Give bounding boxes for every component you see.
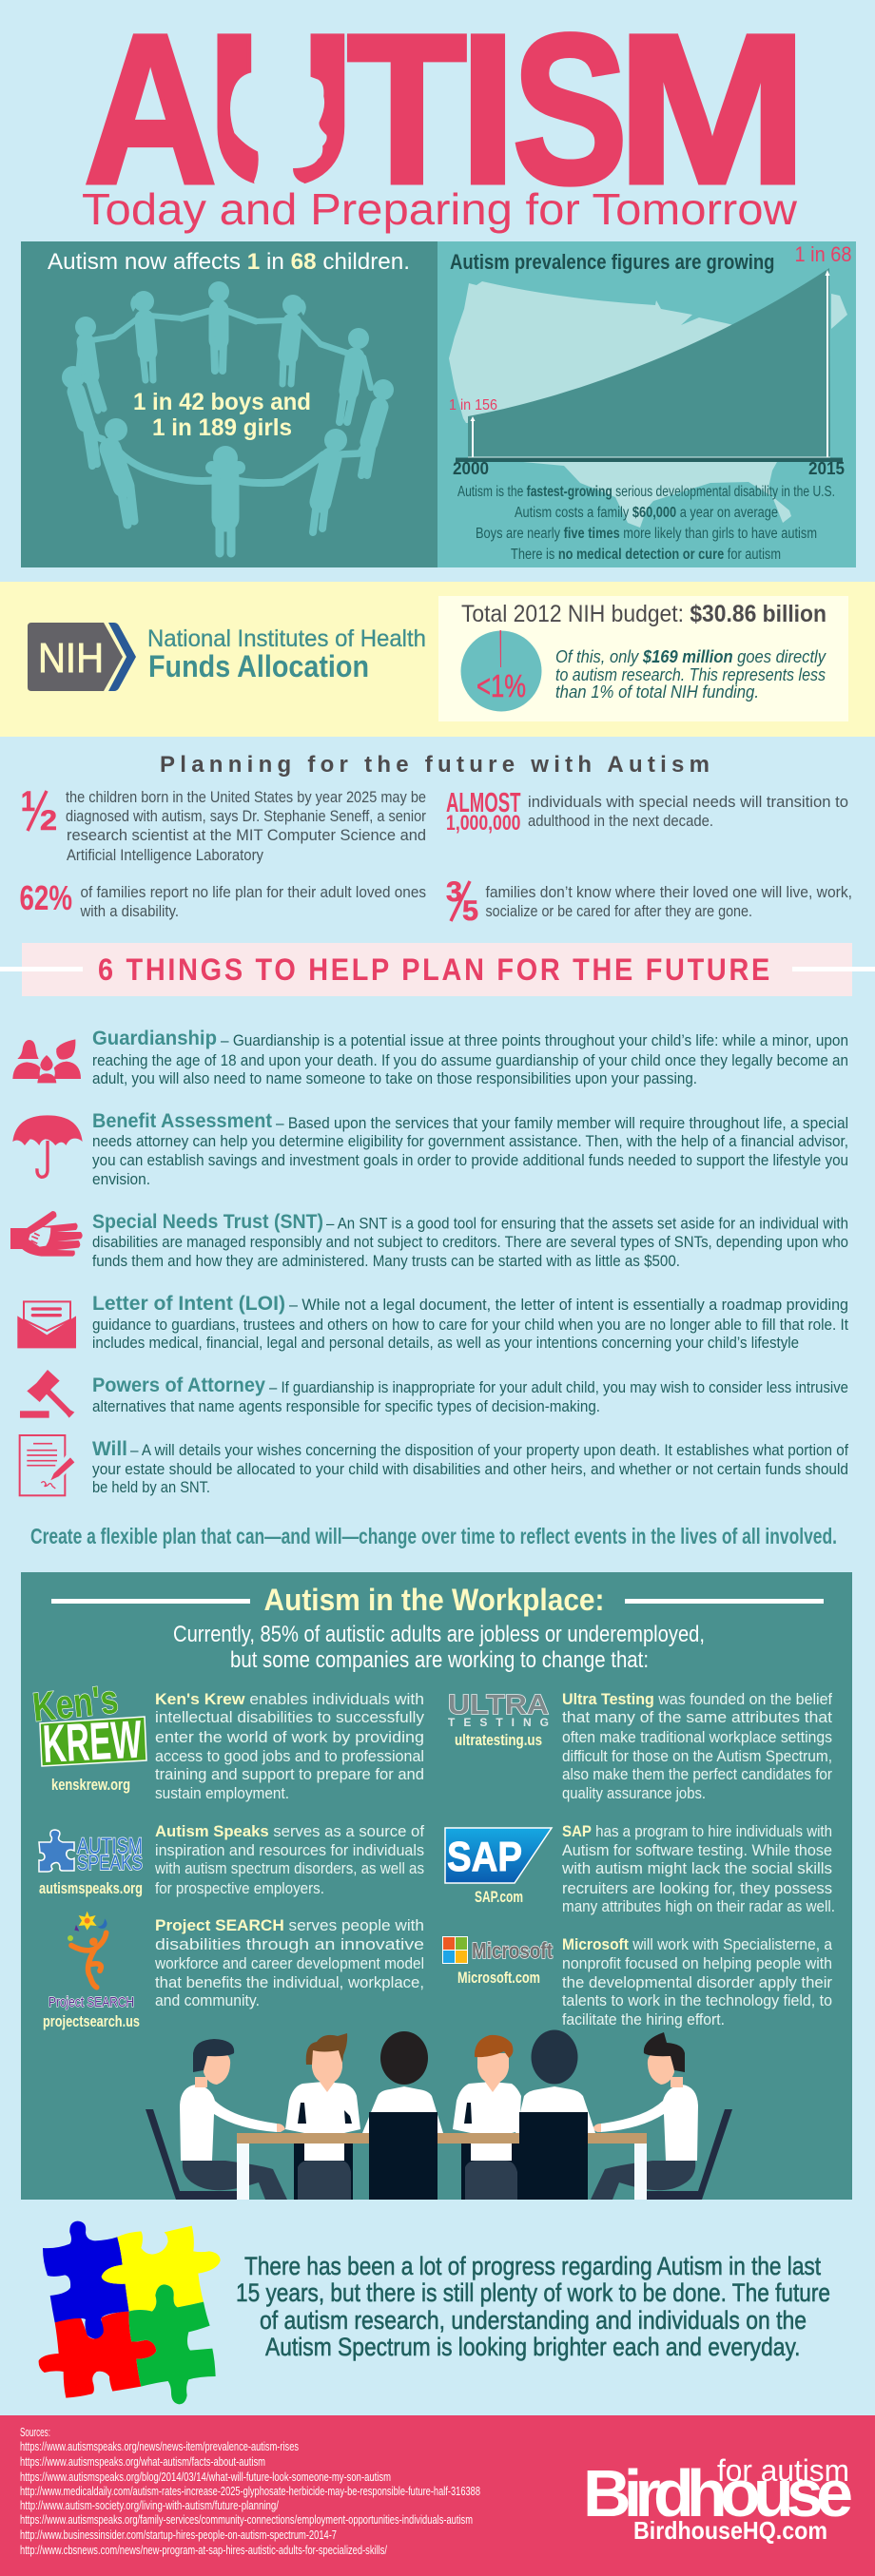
heading: workplace bbox=[51, 1583, 824, 1617]
text block: Ken's Krew: enter the world of work by providing bbox=[155, 1728, 424, 1746]
person: front orange hair bbox=[453, 2035, 521, 2200]
item: letter of intent bbox=[17, 1293, 848, 1352]
text block: Ultra Testing: often make traditional workplace settings bbox=[562, 1728, 832, 1746]
text block bbox=[92, 1379, 848, 1415]
stat: boys and girls: 1 in 42 boys and bbox=[133, 389, 311, 415]
text block: Microsoft: Microsoft will work with Specialisterne, a bbox=[562, 1935, 832, 1953]
stat: three fifths: 3 bbox=[446, 876, 462, 908]
arrow: year 2000 bbox=[470, 416, 476, 457]
chart: pie less than 1 percent: <1% bbox=[476, 668, 526, 703]
stat: boys and girls bbox=[133, 389, 311, 441]
person: back navy hair bbox=[515, 2030, 595, 2133]
text block: share of funding: than 1% of total NIH funding. bbox=[555, 682, 759, 702]
text block: Microsoft: facilitate the hiring effort. bbox=[562, 2010, 725, 2028]
text block: diagnosed with autism, says Dr. Stephanie Seneff, a senior bbox=[66, 807, 426, 825]
text block: Project SEARCH bbox=[154, 1916, 424, 2009]
url: kenskrew.org: kenskrew.org bbox=[51, 1776, 130, 1794]
url: Microsoft.com: Microsoft.com bbox=[457, 1969, 540, 1987]
text block: Ken's Krew: access to good jobs and to professional bbox=[155, 1747, 424, 1765]
text block: SAP: SAP has a program to hire individuals with bbox=[562, 1822, 832, 1840]
text block: Microsoft: nonprofit focused on helping people with bbox=[562, 1954, 832, 1972]
item: special needs trust bbox=[10, 1211, 848, 1270]
text block: facts: Autism costs a family $60,000 a year on average bbox=[515, 505, 778, 521]
text block: – While not a legal document, the letter of intent is essentially a roadmap providing bbox=[289, 1297, 848, 1314]
text block: adulthood in the next decade. bbox=[528, 812, 713, 830]
icon: document with pen bbox=[20, 1435, 76, 1495]
chart: pie less than 1 percent bbox=[460, 630, 542, 711]
sources: Sources: bbox=[20, 2425, 50, 2439]
text block: envision. bbox=[92, 1171, 150, 1188]
text block: adult, you will also need to name someone to take on those responsibilities upon your passing. bbox=[92, 1070, 697, 1087]
text block: intro bbox=[173, 1622, 705, 1673]
text block: the children born in the United States by year 2025 may be bbox=[66, 788, 426, 806]
logo: Ken's Krew bbox=[30, 1677, 146, 1774]
sources bbox=[20, 2425, 480, 2557]
panel: NIH budget bbox=[438, 596, 848, 721]
text block: Project SEARCH: that benefits the individual, workplace, bbox=[155, 1973, 424, 1991]
text block: facts bbox=[457, 484, 835, 563]
arrow: year 2015 bbox=[826, 270, 829, 457]
text block: individuals with special needs will transition to bbox=[528, 793, 848, 811]
subtitle: Today and Preparing for Tomorrow bbox=[82, 184, 798, 234]
text block: Project SEARCH: Project SEARCH serves people with bbox=[155, 1916, 424, 1934]
stat: 62 percent: 62% bbox=[19, 878, 72, 917]
text block: research scientist at the MIT Computer Science and bbox=[67, 826, 426, 844]
text block: share of funding: to autism research. This represents less bbox=[555, 665, 826, 684]
text block: alternatives that name agents responsible for specific types of decision-making. bbox=[92, 1398, 600, 1415]
logo: Project SEARCH bbox=[49, 1912, 134, 2010]
text block: Microsoft: talents to work in the technology field, to bbox=[562, 1991, 832, 2009]
text block: socialize or be cared for after they are gone. bbox=[485, 902, 752, 920]
logo: Ken's Krew: KREW bbox=[41, 1709, 144, 1774]
text block: of families report no life plan for their adult loved ones bbox=[80, 883, 426, 901]
text block: SAP: with autism might lack the social skills bbox=[561, 1859, 832, 1877]
heading: Benefit Assessment bbox=[92, 1110, 272, 1132]
logo: Autism Speaks: AUTISM bbox=[77, 1834, 143, 1859]
text block: Microsoft bbox=[562, 1935, 832, 2028]
text block: Autism Speaks bbox=[154, 1822, 424, 1897]
person: front brown hair bbox=[285, 2033, 360, 2200]
panel: NIH band bbox=[0, 582, 875, 737]
stat: almost 1,000,000: 1,000,000 bbox=[446, 811, 521, 835]
heading: prevalence figures: Autism prevalence figures are growing bbox=[450, 250, 774, 274]
item: guardianship bbox=[12, 1028, 848, 1087]
text block: Ultra Testing: also make them the perfect candidates for bbox=[562, 1765, 832, 1783]
text block: with a disability. bbox=[80, 902, 179, 920]
item: will bbox=[20, 1435, 848, 1496]
sources: https://www.autismspeaks.org/blog/2014/03/14/what-will-future-look-someone-my-son-autism bbox=[20, 2470, 391, 2484]
url: SAP.com: SAP.com bbox=[475, 1888, 523, 1906]
icon: puzzle bbox=[39, 2221, 221, 2404]
map: US silhouette bbox=[449, 281, 847, 528]
text block: closing statement bbox=[236, 2252, 830, 2361]
text block: Ultra Testing bbox=[562, 1690, 832, 1802]
text block: families don’t know where their loved one will live, work, bbox=[485, 883, 852, 901]
sources: http://www.autism-society.org/living-with-autism/future-planning/ bbox=[20, 2498, 279, 2512]
text block: SAP: recruiters are looking for, they possess bbox=[562, 1879, 832, 1897]
stat: almost 1,000,000: ALMOST bbox=[446, 788, 521, 818]
axis bar bbox=[456, 456, 843, 462]
person: back dark hair bbox=[362, 2031, 443, 2133]
logo: SAP: SAP bbox=[447, 1834, 522, 1880]
heading: total budget: Total 2012 NIH budget: $30.86 billion bbox=[461, 601, 826, 627]
sources: https://www.autismspeaks.org/news/news-item/prevalence-autism-rises bbox=[20, 2439, 299, 2453]
text block: SAP: many attributes high on their radar as well. bbox=[562, 1897, 835, 1915]
logo: Microsoft bbox=[442, 1936, 553, 1964]
text block: Ultra Testing: Ultra Testing was founded on the belief bbox=[562, 1690, 832, 1708]
text block: share of funding: Of this, only $169 million goes directly bbox=[555, 647, 826, 666]
text block: – Guardianship is a potential issue at three points throughout your child’s life: while a minor, upon bbox=[221, 1032, 848, 1049]
illustration: circle of children holding hands bbox=[62, 281, 394, 553]
text block: Ultra Testing: quality assurance jobs. bbox=[562, 1784, 706, 1802]
logo: Birdhouse for autism: BirdhouseHQ.com bbox=[633, 2516, 827, 2545]
heading: Guardianship bbox=[92, 1028, 217, 1049]
text block bbox=[485, 883, 852, 920]
item: benefit assessment bbox=[12, 1110, 848, 1188]
sources: https://www.autismspeaks.org/what-autism/facts-about-autism bbox=[20, 2454, 265, 2469]
text block: Ken's Krew: Ken's Krew enables individuals with bbox=[155, 1690, 424, 1708]
text block: – Based upon the services that your family member will require throughout life, a special bbox=[276, 1115, 848, 1132]
text block bbox=[92, 1032, 848, 1087]
icon: gavel bbox=[20, 1370, 74, 1418]
text block bbox=[92, 1115, 848, 1188]
chart: growth area bbox=[468, 268, 830, 457]
logo: Birdhouse for autism: for autism bbox=[717, 2453, 849, 2488]
sources: https://www.autismspeaks.org/family-services/community-connections/employment-opportunities-individuals-autism bbox=[20, 2512, 473, 2527]
text block: Autism Speaks: for prospective employers. bbox=[155, 1879, 324, 1897]
text block: Autism Speaks: inspiration and resources for individuals bbox=[155, 1841, 424, 1859]
text block: SAP: Autism for software testing. While those bbox=[562, 1841, 832, 1859]
stat: one half bbox=[21, 786, 426, 864]
logo: Project SEARCH: Project SEARCH bbox=[49, 1994, 134, 2010]
text block: Microsoft: the developmental disorder apply their bbox=[562, 1973, 832, 1991]
heading: workplace: Autism in the Workplace: bbox=[264, 1583, 605, 1617]
heading: 1 in 68 children: Autism now affects 1 in 68 children. bbox=[48, 249, 410, 275]
chair: back right bbox=[519, 2112, 588, 2200]
text block: funds them and how they are administered. Many trusts can be started with as little as $500. bbox=[92, 1253, 680, 1270]
text block bbox=[528, 793, 848, 830]
stat: one half: 1 bbox=[21, 786, 35, 817]
table bbox=[237, 2133, 647, 2200]
stat: three fifths bbox=[446, 876, 852, 927]
chair: back left bbox=[369, 2112, 438, 2200]
sources: http://www.cbsnews.com/news/new-program-at-sap-hires-autistic-adults-for-specialized-skills/ bbox=[20, 2543, 387, 2557]
logo: SAP bbox=[445, 1828, 552, 1883]
text block bbox=[92, 1215, 848, 1270]
text block: Ultra Testing: difficult for those on the Autism Spectrum, bbox=[562, 1747, 832, 1765]
text block: Project SEARCH: workforce and career development model bbox=[154, 1954, 424, 1972]
url: ultratesting.us: ultratesting.us bbox=[455, 1731, 542, 1749]
stat: 62 percent bbox=[19, 878, 426, 920]
item: powers of attorney bbox=[20, 1370, 848, 1418]
text block: Ultra Testing: that many of the same attributes that bbox=[562, 1708, 832, 1726]
footer bbox=[0, 2415, 875, 2576]
text block: Ken's Krew: intellectual disabilities to successfully bbox=[155, 1708, 424, 1726]
label: 2000: 2000 bbox=[453, 459, 489, 478]
url: autismspeaks.org: autismspeaks.org bbox=[39, 1879, 143, 1897]
illustration: meeting around table bbox=[146, 2030, 732, 2200]
text block: intro: but some companies are working to change that: bbox=[230, 1647, 649, 1673]
logo: Ken's Krew: Ken's bbox=[30, 1677, 121, 1731]
text block bbox=[80, 883, 426, 920]
text block: includes medical, financial, legal and personal details, as well as your intentions concerning your child’s lifestyle bbox=[92, 1335, 799, 1352]
person: right side bbox=[591, 2032, 732, 2200]
heading: Powers of Attorney bbox=[92, 1375, 265, 1396]
text block: Ken's Krew bbox=[155, 1690, 424, 1802]
text block: Project SEARCH: and community. bbox=[155, 1991, 260, 2009]
title: AUTISM bbox=[84, 0, 808, 228]
stat: three fifths: 5 bbox=[462, 895, 478, 927]
text block: intro: Currently, 85% of autistic adults are jobless or underemployed, bbox=[173, 1622, 705, 1647]
text block: share of funding bbox=[555, 647, 826, 702]
text block: Ken's Krew: sustain employment. bbox=[155, 1784, 289, 1802]
text block: Ken's Krew: training and support to prepare for and bbox=[155, 1765, 424, 1783]
text block bbox=[66, 788, 426, 864]
logo: NIH: NIH bbox=[38, 635, 104, 682]
text block: Autism Speaks: Autism Speaks serves as a source of bbox=[155, 1822, 424, 1840]
banner: 6 things: 6 THINGS TO HELP PLAN FOR THE FUTURE bbox=[98, 952, 772, 987]
url: projectsearch.us: projectsearch.us bbox=[43, 2012, 140, 2030]
text block: Project SEARCH: disabilities through an innovative bbox=[155, 1935, 424, 1953]
icon: family bbox=[12, 1039, 81, 1083]
logo: Birdhouse for autism: Birdhouse bbox=[583, 2456, 852, 2530]
banner: 6 things bbox=[0, 943, 875, 996]
logo: Ultra Testing: TESTING bbox=[448, 1716, 549, 1729]
panel: autism in the workplace bbox=[21, 1572, 852, 2200]
text block: Autism Speaks: with autism spectrum disorders, as well as bbox=[154, 1859, 424, 1877]
text block bbox=[92, 1442, 848, 1496]
panel: autism prevalence children bbox=[21, 241, 438, 567]
heading: National Institutes of Health: National Institutes of Health bbox=[147, 625, 426, 652]
icon: umbrella bbox=[12, 1115, 83, 1177]
icon: envelope bbox=[17, 1301, 76, 1348]
person: left side bbox=[146, 2039, 287, 2200]
stat: boys and girls: 1 in 189 girls bbox=[152, 414, 292, 441]
logo: NIH bbox=[28, 623, 136, 691]
heading: Will bbox=[92, 1438, 127, 1460]
logo: Autism Speaks: SPEAKS bbox=[77, 1851, 143, 1874]
heading: Special Needs Trust (SNT) bbox=[92, 1211, 323, 1233]
label: 1 in 156: 1 in 156 bbox=[449, 397, 497, 413]
heading: planning for the future: Planning for the future with Autism bbox=[160, 752, 710, 778]
text block: Artificial Intelligence Laboratory bbox=[67, 846, 263, 864]
icon: hands bbox=[10, 1211, 83, 1257]
panel: prevalence chart bbox=[438, 241, 856, 567]
heading: Funds Allocation: Funds Allocation bbox=[148, 649, 369, 683]
icon: child head silhouette in the U bbox=[230, 31, 327, 192]
sources: http://www.businessinsider.com/startup-hires-people-on-autism-spectrum-2014-7 bbox=[20, 2528, 337, 2542]
heading: Letter of Intent (LOI) bbox=[92, 1293, 285, 1315]
sources: http://www.medicaldaily.com/autism-rates-increase-2025-glyphosate-herbicide-may-be-responsible-future-half-316388 bbox=[20, 2484, 480, 2498]
text block: facts: There is no medical detection or cure for autism bbox=[511, 547, 781, 563]
logo: Autism Speaks bbox=[39, 1830, 143, 1874]
text block bbox=[92, 1297, 848, 1352]
text block: SAP bbox=[561, 1822, 835, 1915]
label: 2015: 2015 bbox=[808, 459, 845, 478]
text block: facts: Boys are nearly five times more likely than girls to have autism bbox=[476, 526, 817, 542]
logo: Ultra Testing: ULTRA bbox=[448, 1690, 549, 1721]
stat: almost 1,000,000 bbox=[446, 788, 848, 835]
logo: Microsoft: Microsoft bbox=[472, 1938, 553, 1963]
text block: be held by an SNT. bbox=[92, 1479, 210, 1496]
label: 1 in 68: 1 in 68 bbox=[795, 242, 852, 266]
stat: one half: 2 bbox=[40, 805, 57, 836]
